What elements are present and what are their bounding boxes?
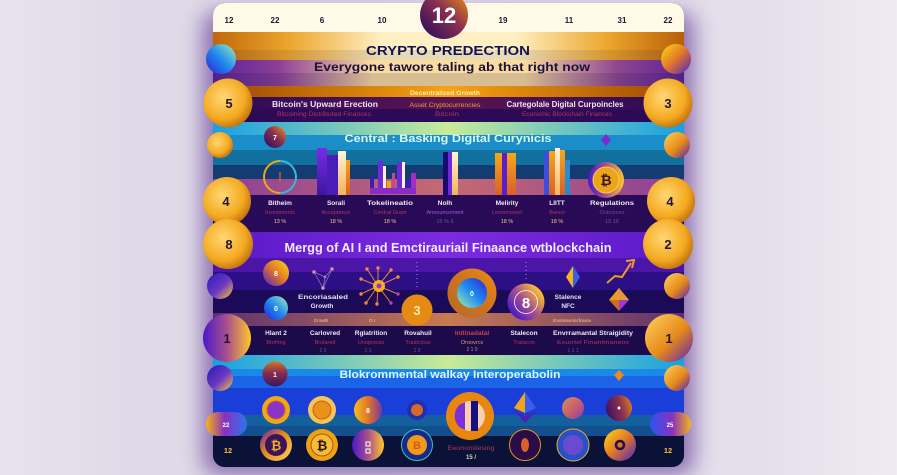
text block: central banking labels: 18 % bbox=[501, 219, 513, 225]
footer numbers bbox=[224, 446, 672, 455]
pill: left bbox=[206, 412, 247, 436]
text block: central banking labels: Investments bbox=[265, 210, 295, 216]
text block: mauve band labels: Growth bbox=[314, 318, 329, 323]
text block: AI section labels: Envrramantal Straigidity bbox=[553, 330, 633, 337]
row: lower coins bbox=[260, 429, 636, 461]
text block: central banking labels: Outcomes bbox=[599, 210, 625, 216]
text block: AI section labels: Exurrtel Finantmaneos bbox=[557, 340, 629, 346]
chart: bars four bbox=[495, 153, 516, 195]
header numbers: 10 bbox=[378, 16, 387, 25]
footer numbers: 12 bbox=[224, 446, 232, 455]
icon: big orange ring bbox=[448, 268, 496, 318]
text block: center coin caption: Eeonomiiesing bbox=[448, 446, 494, 452]
text block: AI section labels: Tratacon bbox=[513, 340, 535, 346]
text block: central banking labels: 15 % 6 bbox=[436, 219, 454, 225]
text block: central banking labels: 18 % bbox=[330, 219, 342, 225]
side spheres: left bbox=[206, 44, 236, 391]
header numbers: 11 bbox=[565, 16, 574, 25]
icon: gauge ring bbox=[264, 161, 296, 193]
text block: AI section labels: Rglatrition bbox=[355, 330, 387, 337]
badge: 8 small bbox=[263, 260, 289, 286]
text block: central banking labels: 18 % bbox=[551, 219, 563, 225]
badge: 7: 7 bbox=[273, 135, 277, 142]
panel: title section bbox=[213, 32, 684, 86]
text block: central banking labels: Central Gram bbox=[373, 210, 407, 216]
text block: first summary band: Bitcoin's Upward Erection bbox=[272, 100, 378, 109]
card shadow bbox=[203, 12, 694, 475]
side spheres: right bbox=[661, 44, 691, 391]
badge: 12 bbox=[420, 0, 468, 39]
chart: bars one bbox=[317, 148, 350, 195]
text block: central banking labels: Lionsmoved bbox=[492, 210, 522, 216]
badge: 5: 5 bbox=[225, 96, 233, 111]
text block: central banking labels: 13 % bbox=[274, 219, 286, 225]
text block: central banking labels: Bitheim bbox=[268, 200, 292, 207]
text block: AI section labels: Carlovred bbox=[310, 330, 340, 337]
panel: header strip bbox=[213, 3, 684, 32]
dotted connector right bbox=[525, 262, 527, 282]
text block: central banking labels: Banco bbox=[549, 210, 565, 216]
text block: central banking labels: Melirity bbox=[496, 200, 519, 207]
subtitle: Everygone tawore taling ab that right now bbox=[314, 62, 590, 74]
icon: node network bbox=[312, 268, 334, 290]
text block: mauve band labels: O I bbox=[369, 318, 375, 323]
panel: first summary band bbox=[213, 86, 684, 122]
title: CRYPTO PREDECTION bbox=[366, 44, 530, 58]
icon: small diamond bbox=[601, 134, 611, 146]
text block: first summary band bbox=[272, 91, 624, 118]
header numbers: 22 bbox=[664, 16, 673, 25]
badge: 1 left: 1 bbox=[223, 331, 231, 346]
panel: AI and finance section bbox=[213, 232, 684, 355]
badge: 2 bbox=[643, 219, 693, 269]
text block: AI section labels: 1 1 1 bbox=[567, 348, 579, 354]
panel: interoperability section bbox=[213, 355, 684, 467]
icon: sunburst network bbox=[359, 266, 400, 306]
badge: 4 right: 4 bbox=[666, 194, 674, 209]
icon: ethereum pyramid bbox=[514, 392, 536, 423]
header numbers: 19 bbox=[499, 16, 508, 25]
text block: AI section labels: 1 1 bbox=[365, 348, 372, 354]
text block: mauve band labels bbox=[314, 318, 591, 323]
badge: 1 small: 1 bbox=[273, 370, 277, 379]
text block: center coin caption: 15 / bbox=[466, 455, 476, 461]
text block: stalence NFC: NFC bbox=[561, 303, 575, 310]
panel: infographic card bbox=[213, 3, 684, 467]
badge: 0 small bbox=[264, 296, 288, 320]
text block: AI section labels: Unoprocss bbox=[358, 340, 384, 346]
text block: first summary band: Economic Blockchain Finances bbox=[522, 112, 612, 118]
text block: mauve band labels: Environmental finance bbox=[553, 318, 591, 323]
header numbers: 31 bbox=[618, 16, 627, 25]
text block: AI section labels: Initinadatal bbox=[455, 330, 489, 337]
badge: 4 left bbox=[203, 177, 251, 225]
text block: stalence NFC bbox=[555, 294, 582, 310]
badge: 8 small: 8 bbox=[274, 271, 278, 278]
row: lower coins: ₿ bbox=[317, 438, 327, 453]
badge: 1 right bbox=[645, 314, 693, 362]
text block: first summary band: Cartegolale Digital Curpoincles bbox=[506, 100, 624, 109]
text block: central banking labels: Acceptance bbox=[322, 210, 350, 216]
text block: AI section labels: Brofring bbox=[266, 340, 286, 346]
text block: AI section labels: Stalecon bbox=[510, 330, 538, 337]
icon: bitcoin coin: ₿ bbox=[600, 172, 612, 188]
row: lower coins: ₿ bbox=[271, 438, 281, 453]
text block: AI section labels bbox=[265, 330, 633, 354]
text block: central banking labels: 18 % bbox=[384, 219, 396, 225]
text block: central banking labels: Sorali bbox=[327, 200, 345, 207]
text block: central banking labels: Tokelineatio bbox=[367, 200, 413, 207]
badge: 7 bbox=[264, 126, 286, 148]
icon: ethereum diamond bbox=[566, 266, 580, 288]
footer numbers: 12 bbox=[664, 446, 672, 455]
header numbers: 6 bbox=[320, 16, 325, 25]
chart: bars two bbox=[370, 161, 416, 194]
badge: 3: 3 bbox=[664, 96, 672, 111]
text block: AI section labels: Tradicious bbox=[405, 340, 431, 346]
text block: central banking labels: 15 16 bbox=[605, 219, 619, 225]
text block: AI section labels: 2 1 0 bbox=[466, 347, 478, 353]
badge: 3 center: 3 bbox=[413, 303, 421, 318]
text block: central banking labels: LIITT bbox=[549, 200, 565, 207]
heading: AI and finance: Mergg of AI I and Emctirauriail Finaance wtblockchain bbox=[284, 241, 612, 255]
header numbers: 12 bbox=[225, 16, 234, 25]
badge: 12: 12 bbox=[432, 3, 456, 28]
badge: 1 left bbox=[203, 314, 251, 362]
text block: AI section labels: 1 3 bbox=[414, 348, 421, 354]
badge: 8 ring: 8 bbox=[522, 295, 530, 312]
pill: right bbox=[650, 412, 691, 436]
heading: interoperability: Blokrommental walkay Interoperabolin bbox=[340, 369, 561, 381]
pill: left: 22 bbox=[223, 423, 230, 429]
text block: AI section labels: Brolared bbox=[315, 340, 335, 346]
badge: 8 ring bbox=[500, 276, 552, 328]
badge: 2: 2 bbox=[664, 237, 672, 252]
text block: first summary band: Asset Cryptocurrencies bbox=[410, 103, 480, 109]
text block: AI section labels: Hlant 2 bbox=[265, 330, 287, 337]
row: lower coins: B bbox=[413, 440, 421, 452]
badge: 5 bbox=[204, 78, 252, 128]
icon: orange purple diamond bbox=[609, 288, 629, 311]
pill: right: 25 bbox=[667, 423, 674, 429]
row: upper coins bbox=[262, 390, 637, 430]
chart: bars five bbox=[544, 148, 570, 195]
text block: encapsulated growth: Encoriasaled bbox=[298, 294, 348, 301]
text block: encapsulated growth bbox=[298, 294, 348, 310]
header numbers bbox=[225, 16, 673, 25]
text block: first summary band: Bitcoin bbox=[435, 112, 459, 118]
badge: 8: 8 bbox=[225, 237, 233, 252]
text block: stalence NFC: Stalence bbox=[555, 294, 582, 301]
badge: 4 left: 4 bbox=[222, 194, 230, 209]
icon: tiny diamond bbox=[614, 370, 624, 381]
badge: 1 right: 1 bbox=[665, 331, 673, 346]
text block: AI section labels: Rovahuil bbox=[404, 330, 432, 337]
text block: center coin caption bbox=[448, 446, 494, 461]
text block: first summary band: Bitcoining Distributed Finances bbox=[277, 112, 371, 118]
badge: 1 small bbox=[257, 356, 293, 392]
text block: encapsulated growth: Growth bbox=[311, 303, 333, 310]
text block: AI section labels: Oroovrcs bbox=[461, 340, 483, 346]
text block: central banking labels: Announcement bbox=[426, 210, 464, 216]
badge: 3 center bbox=[402, 294, 432, 326]
text block: first summary band: Decentralized Growth bbox=[410, 91, 480, 97]
row: upper coins: 8 bbox=[366, 408, 370, 415]
badge: 0 small: 0 bbox=[274, 306, 278, 313]
badge: 4 right bbox=[647, 177, 695, 225]
chart: bars three bbox=[443, 152, 458, 195]
badge: 3 bbox=[644, 78, 692, 128]
heading: central banking: Central : Basking Digital Curynicis bbox=[344, 133, 552, 145]
text block: central banking labels bbox=[265, 200, 634, 225]
icon: big orange ring: 0 bbox=[470, 291, 474, 298]
icon: central striped coin bbox=[446, 392, 494, 440]
text block: central banking labels: Nolh bbox=[438, 200, 452, 207]
header numbers: 22 bbox=[271, 16, 280, 25]
text block: AI section labels: 1 0 bbox=[320, 348, 327, 354]
badge: 8 bbox=[203, 219, 253, 269]
icon: bitcoin coin bbox=[588, 162, 624, 198]
text block: central banking labels: Regulations bbox=[590, 200, 634, 207]
dotted connector left bbox=[416, 262, 418, 288]
panel: central banking section bbox=[213, 122, 684, 232]
icon: rising arrow bbox=[607, 260, 634, 283]
